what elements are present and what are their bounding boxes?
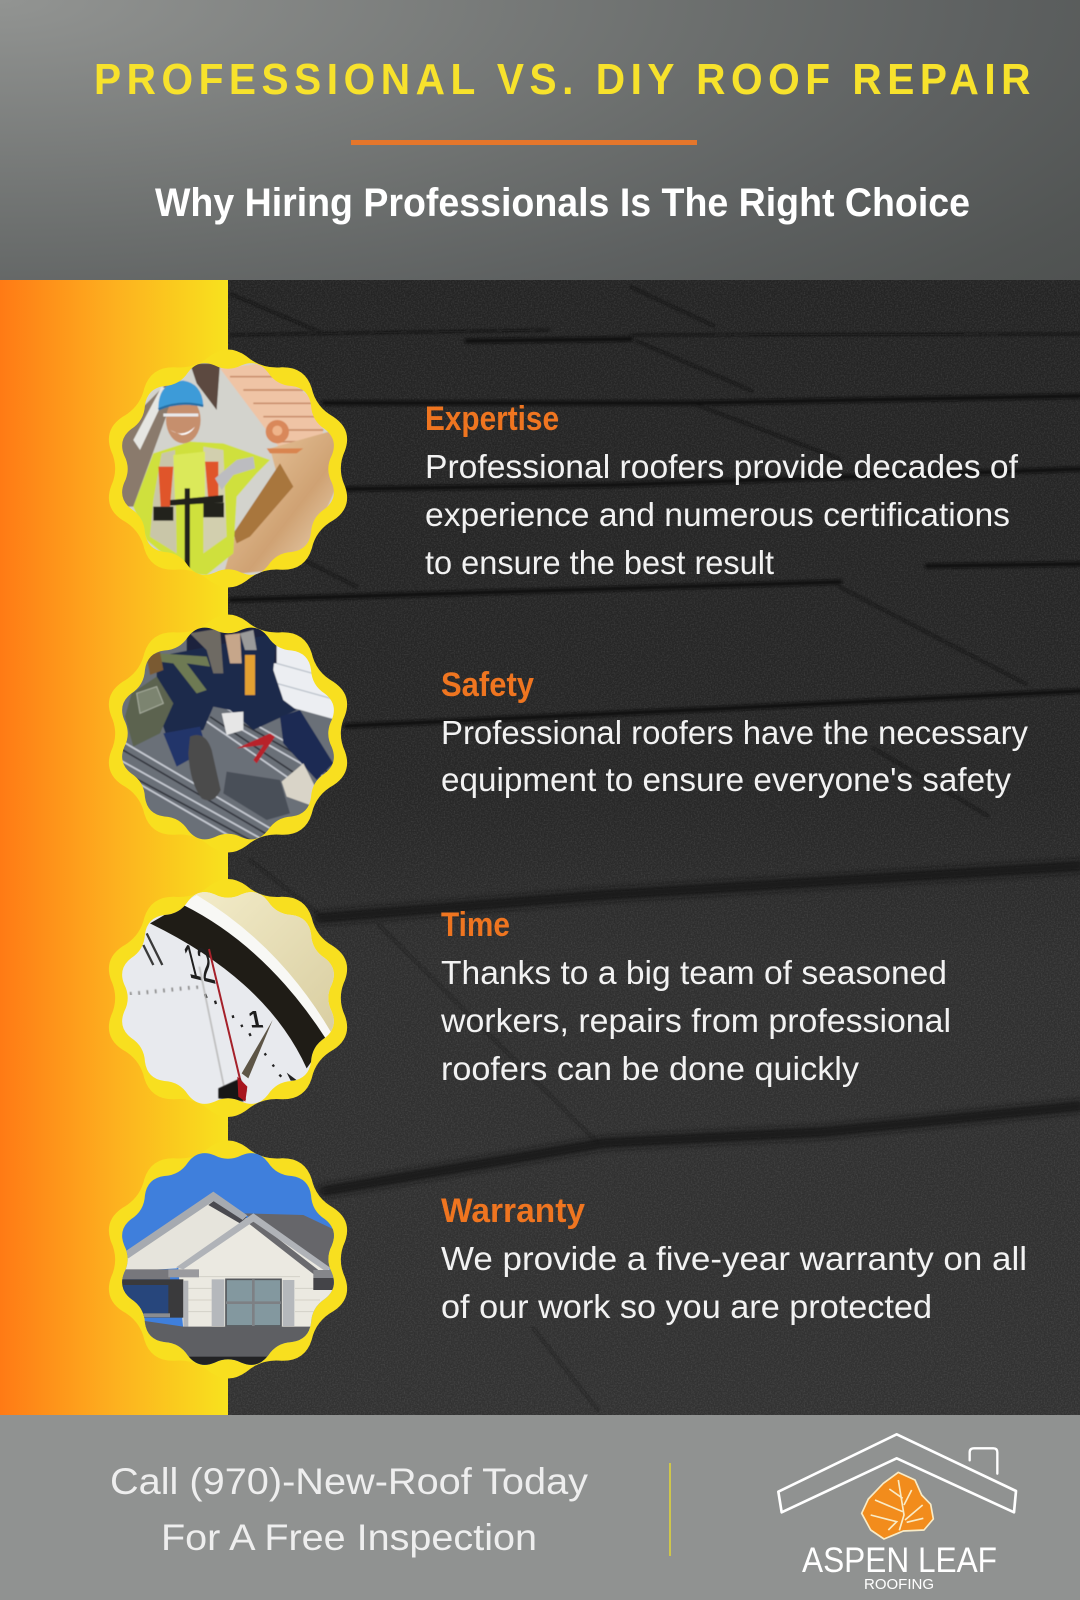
text: expertise description (425, 448, 1019, 581)
item: expertise (425, 400, 1019, 581)
icon: leaf (862, 1472, 933, 1539)
text: time description: Thanks to a big team of seasoned (441, 954, 947, 991)
text: warranty description: of our work so you are protected (441, 1288, 932, 1325)
heading: warranty: Warranty (441, 1192, 585, 1230)
item: safety (441, 666, 1028, 798)
text: expertise description: to ensure the best result (425, 544, 774, 581)
text: expertise description: Professional roofers provide decades of (425, 448, 1019, 485)
logo: aspen leaf roofing (778, 1434, 1016, 1593)
icon: chimney (970, 1448, 997, 1474)
text: warranty description (441, 1240, 1027, 1325)
gradient side band (0, 280, 228, 1416)
item: warranty (441, 1192, 1027, 1325)
shingle background (228, 280, 1080, 1416)
footer divider (669, 1463, 671, 1556)
orange divider (351, 140, 697, 145)
icon: roof outline (778, 1434, 1016, 1512)
photo badge: expertise worker (108, 350, 348, 588)
header panel (0, 0, 1080, 281)
text: expertise description: experience and numerous certifications (425, 496, 1010, 533)
text: safety description: Professional roofers have the necessary (441, 714, 1028, 751)
call to action text (110, 1461, 589, 1558)
text: time description: roofers can be done quickly (441, 1050, 860, 1087)
heading: time: Time (441, 906, 510, 944)
photo badge: warranty house (108, 1140, 348, 1378)
subtitle: Why Hiring Professionals Is The Right Choice (155, 181, 970, 225)
footer panel (0, 1415, 1080, 1600)
logo subtext: ROOFING (864, 1577, 934, 1593)
text: warranty description: We provide a five-year warranty on all (441, 1240, 1027, 1277)
clock numeral 12: 12 (178, 933, 220, 996)
photo badge: time clock (108, 879, 348, 1117)
logo wordmark: ASPEN LEAF (802, 1541, 997, 1580)
call to action text: For A Free Inspection (161, 1517, 537, 1558)
heading: expertise: Expertise (425, 400, 559, 438)
text: time description (440, 954, 951, 1087)
item: time (440, 906, 951, 1087)
heading: safety: Safety (441, 666, 534, 704)
text: time description: workers, repairs from professional (440, 1002, 951, 1039)
clock numeral 1: 1 (246, 1007, 265, 1033)
call to action text: Call (970)-New-Roof Today (110, 1461, 589, 1502)
text: safety description: equipment to ensure everyone's safety (441, 761, 1011, 798)
photo badge: safety roofer (108, 614, 348, 852)
text: safety description (441, 714, 1028, 798)
